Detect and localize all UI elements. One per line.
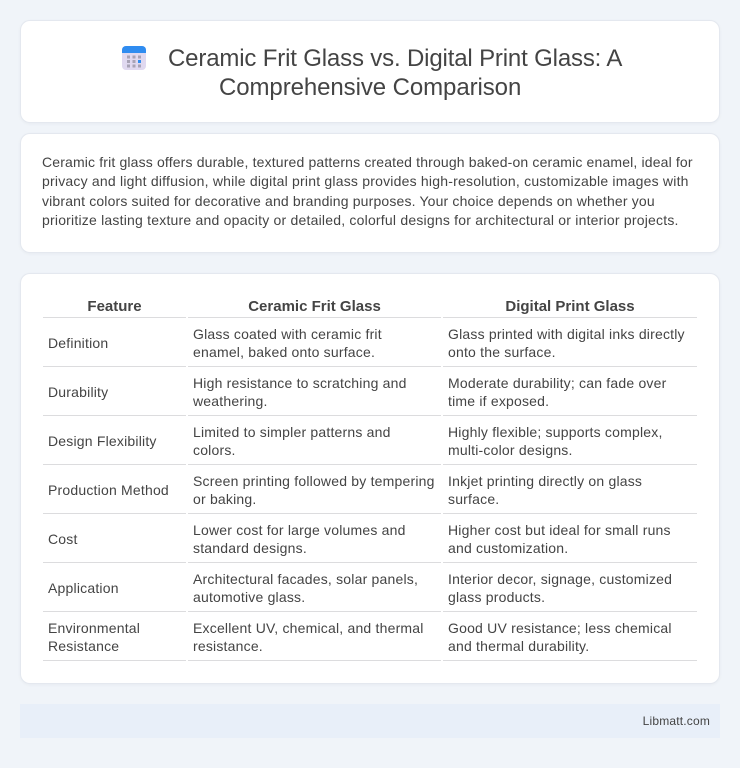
row: production method: Production Method (48, 482, 169, 498)
row: durability: time if exposed. (448, 393, 549, 409)
row: production method: Inkjet printing directly on glass (448, 473, 642, 489)
table header (87, 298, 635, 315)
table header: Digital Print Glass (505, 298, 635, 315)
row: definition (48, 326, 685, 360)
row: design flexibility: colors. (193, 442, 236, 458)
row: durability: Moderate durability; can fade over (448, 375, 666, 391)
row: production method (48, 473, 642, 507)
row: definition: Definition (48, 335, 108, 351)
row: application: Architectural facades, solar panels, (193, 571, 418, 587)
row: definition: enamel, baked onto surface. (193, 344, 375, 360)
row: environmental resistance: Good UV resistance; less chemical (448, 620, 672, 636)
footer credit: Libmatt.com (643, 714, 710, 728)
row: durability (48, 375, 666, 409)
row: cost: Lower cost for large volumes and (193, 522, 406, 538)
row: production method: surface. (448, 491, 499, 507)
table header: Feature (87, 298, 142, 315)
row: application: glass products. (448, 589, 545, 605)
row: cost: standard designs. (193, 540, 307, 556)
row: design flexibility (48, 424, 663, 458)
row: definition: Glass coated with ceramic frit (193, 326, 382, 342)
row: cost: Cost (48, 531, 78, 547)
text block: introduction: prioritize lasting texture and opacity or detailed, colorful designs for architectural or interior projects. (42, 212, 679, 228)
row: application: automotive glass. (193, 589, 305, 605)
row: definition: onto the surface. (448, 344, 556, 360)
title: Comprehensive Comparison (219, 74, 521, 101)
row: design flexibility: Limited to simpler patterns and (193, 424, 391, 440)
title: Ceramic Frit Glass vs. Digital Print Glass: A (168, 45, 622, 72)
row: design flexibility: multi-color designs. (448, 442, 573, 458)
row: design flexibility: Highly flexible; supports complex, (448, 424, 663, 440)
row: application: Application (48, 580, 119, 596)
row: application: Interior decor, signage, customized (448, 571, 672, 587)
text block: introduction: vibrant colors suited for decorative and branding purposes. Your choice depends on whether you (42, 193, 655, 209)
row: environmental resistance: Excellent UV, chemical, and thermal (193, 620, 424, 636)
text block: introduction: privacy and light diffusion, while digital print glass provides high-resolution, customizable images with (42, 173, 689, 189)
row: durability: High resistance to scratching and (193, 375, 407, 391)
footer (20, 704, 720, 738)
row: cost (48, 522, 671, 556)
row: environmental resistance: and thermal durability. (448, 638, 589, 654)
row: environmental resistance: Resistance (48, 638, 119, 654)
row: cost: Higher cost but ideal for small runs (448, 522, 671, 538)
row: environmental resistance (48, 620, 672, 654)
row: durability: weathering. (193, 393, 268, 409)
row: application (48, 571, 672, 605)
panel: header (20, 20, 720, 123)
row: durability: Durability (48, 384, 108, 400)
title (168, 45, 622, 101)
icon: calendar (122, 46, 146, 70)
row: production method: Screen printing followed by tempering (193, 473, 435, 489)
panel: comparison table (20, 273, 720, 684)
text block: introduction: Ceramic frit glass offers durable, textured patterns created through baked-on ceramic enamel, ideal for (42, 154, 693, 170)
row: production method: or baking. (193, 491, 256, 507)
row: definition: Glass printed with digital inks directly (448, 326, 685, 342)
row: design flexibility: Design Flexibility (48, 433, 157, 449)
row: environmental resistance: Environmental (48, 620, 140, 636)
table header: Ceramic Frit Glass (248, 298, 381, 315)
panel: introduction (20, 133, 720, 253)
text block: introduction (42, 154, 693, 228)
row: environmental resistance: resistance. (193, 638, 263, 654)
row: cost: and customization. (448, 540, 568, 556)
